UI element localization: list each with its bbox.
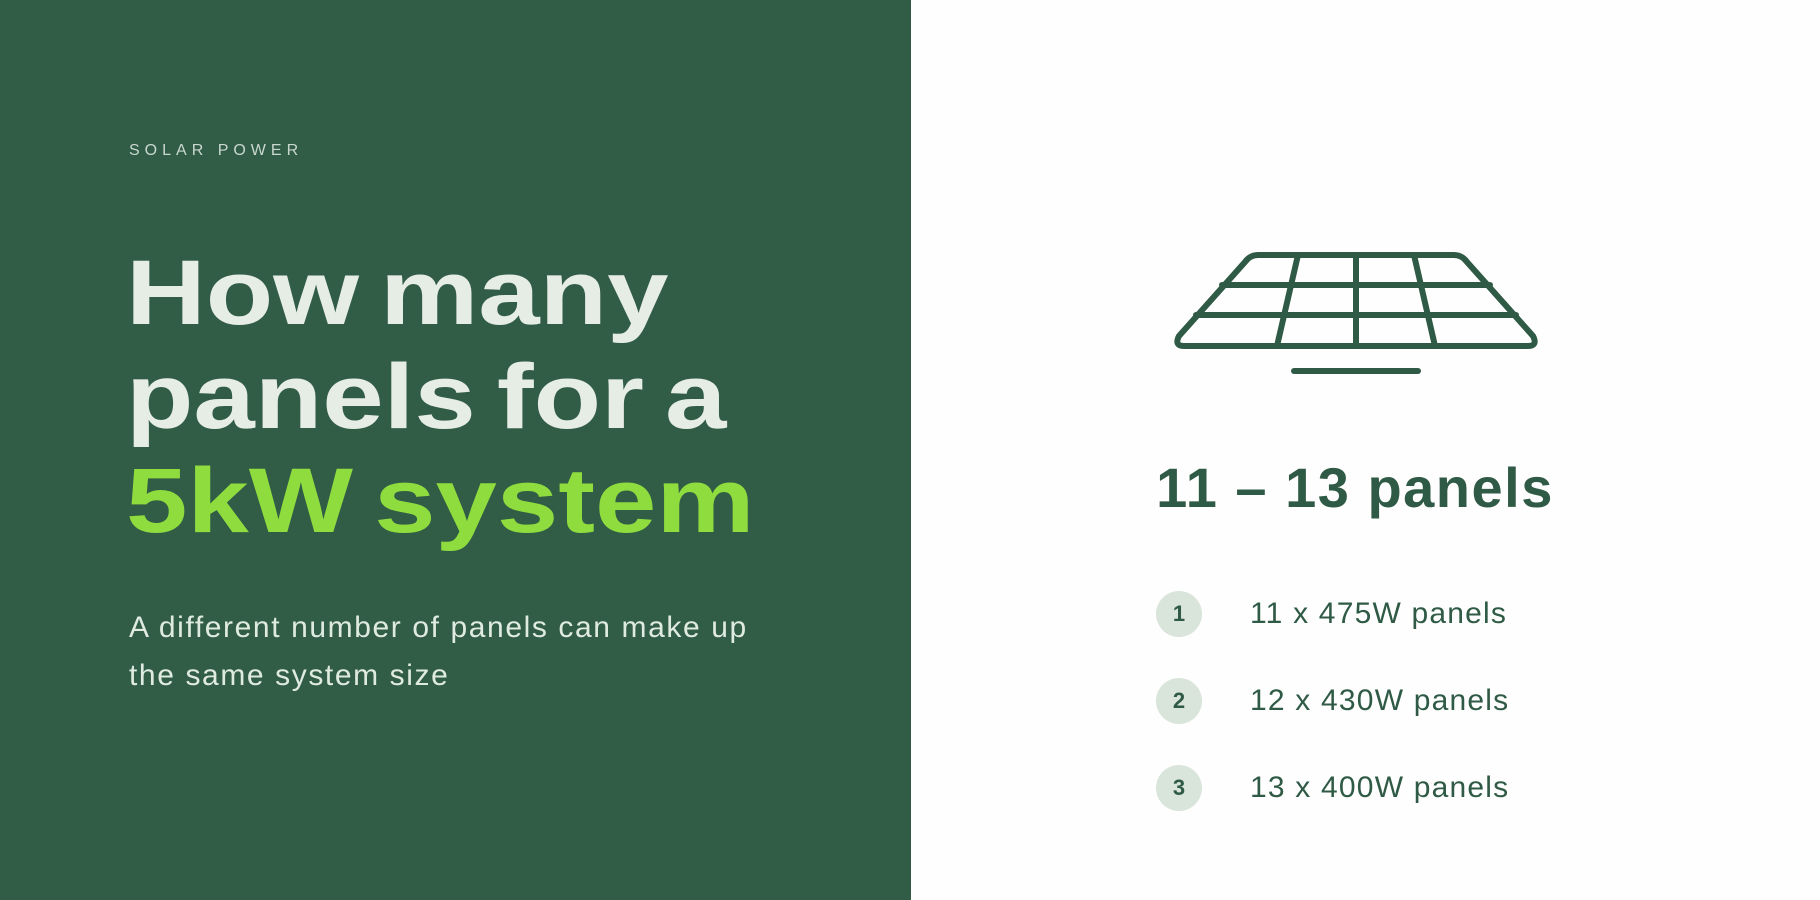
list item 2: 2 [1173,688,1185,713]
title [126,242,755,552]
title: 5kW system [126,450,755,552]
heading: 11-13 panels: 11 – 13 panels [1156,456,1554,519]
list item 1 [1156,591,1507,637]
list item 1: 1 [1173,601,1185,626]
kicker: SOLAR POWER [129,142,303,159]
panel: left [0,0,911,900]
title: panels for a [126,346,726,448]
list item 3: 13 x 400W panels [1250,771,1509,804]
icon: solar panel [1174,252,1538,374]
list item 3: 3 [1173,775,1185,800]
title: How many [126,242,669,344]
list item 3 [1156,765,1509,811]
list item 2: 12 x 430W panels [1250,684,1509,717]
list item 2 [1156,678,1509,724]
subtitle: A different number of panels can make up the same system size [129,611,748,692]
list item 1: 11 x 475W panels [1250,597,1507,630]
